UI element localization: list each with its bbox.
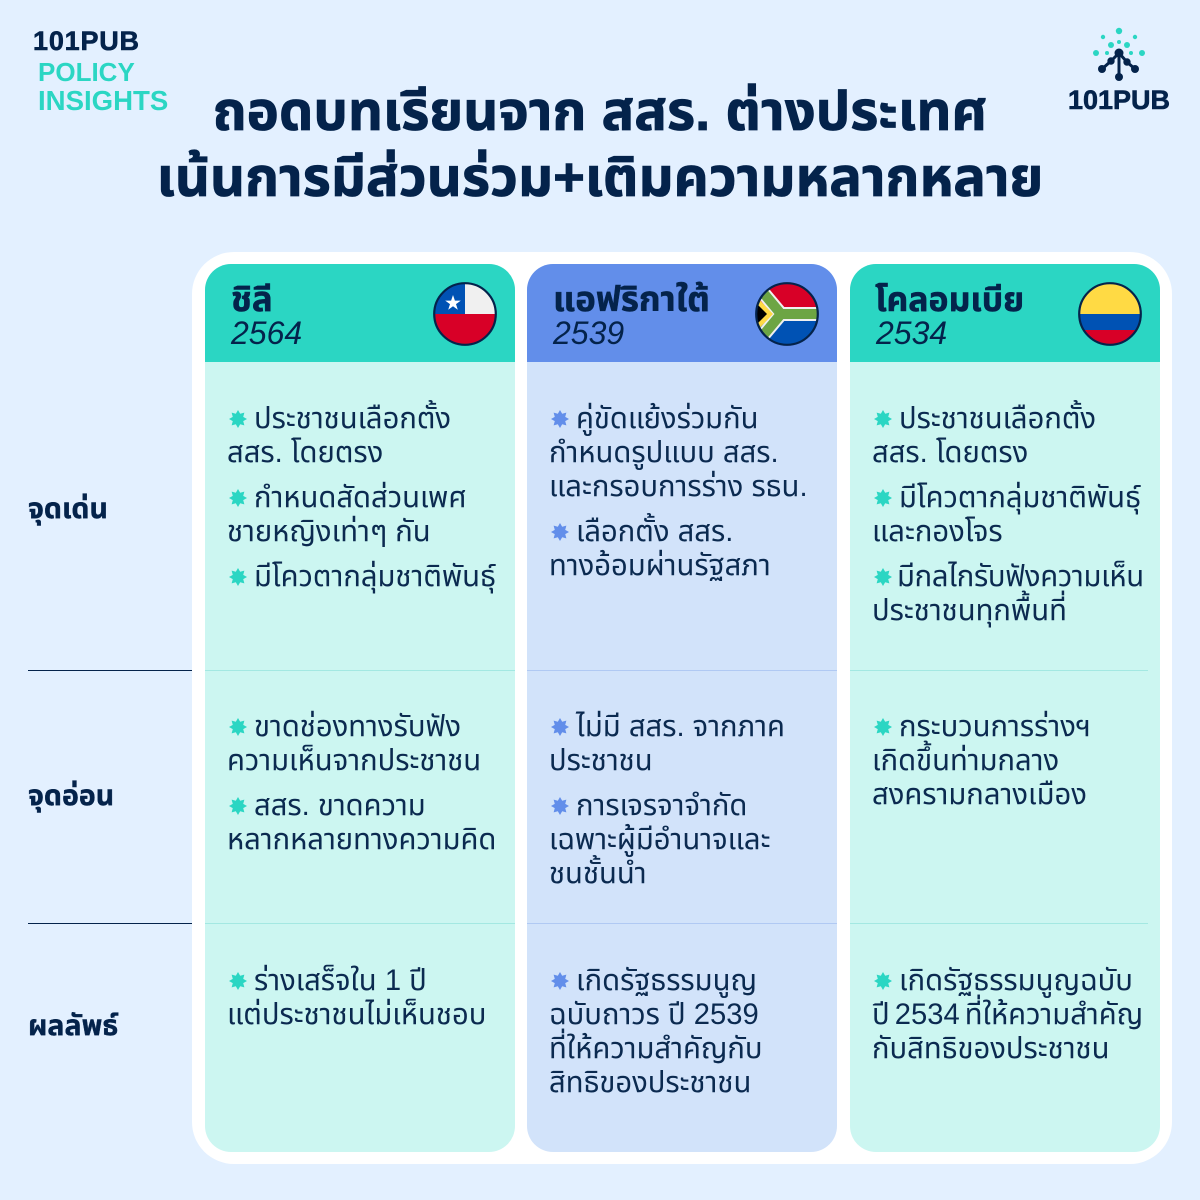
- Chile highlights text: กำหนดสัดส่วนเพศ: [254, 482, 467, 514]
- Chile highlights text: สสร. โดยตรง: [227, 437, 383, 469]
- Chile name: ชิลี: [231, 280, 273, 319]
- South Africa highlights text: [549, 402, 808, 582]
- South Africa results text: เกิดรัฐธรรมนูญ: [576, 965, 757, 997]
- Colombia name: โคลอมเบีย: [875, 281, 1024, 319]
- South Africa highlights text: และกรอบการร่าง รธน.: [549, 471, 808, 503]
- Chile highlights text: มีโควตากลุ่มชาติพันธุ์: [254, 561, 496, 593]
- South Africa weaknesses text: การเจรจาจำกัด: [576, 790, 747, 822]
- Chile highlights text: ประชาชนเลือกตั้ง: [254, 403, 451, 435]
- Colombia highlights text: มีกลไกรับฟังความเห็น: [897, 561, 1144, 593]
- Colombia highlights text: [872, 400, 1144, 628]
- Colombia year: 2534: [876, 315, 947, 351]
- Colombia highlights text: มีโควตากลุ่มชาติพันธุ์: [899, 482, 1141, 514]
- South Africa weaknesses text: ประชาชน: [549, 745, 653, 777]
- Chile highlights text: ชายหญิงเท่าๆ กัน: [227, 516, 431, 548]
- South Africa weaknesses text: ชนชั้นนำ: [549, 858, 647, 890]
- flag: South Africa: [755, 282, 819, 346]
- Chile weaknesses text: สสร. ขาดความ: [254, 790, 426, 822]
- Colombia results text: เกิดรัฐธรรมนูญฉบับ: [899, 965, 1133, 997]
- Colombia highlights text: ประชาชนทุกพื้นที่: [872, 595, 1067, 627]
- column: Chile: [205, 264, 515, 1152]
- logo: 101PUB Policy Insights: POLICY: [38, 57, 135, 87]
- Colombia highlights text: และกองโจร: [872, 516, 1003, 548]
- South Africa results text: ที่ให้ความสำคัญกับ: [549, 1033, 763, 1065]
- title: [157, 81, 1043, 208]
- logo: 101PUB Policy Insights: [33, 26, 168, 116]
- title: เน้นการมีส่วนร่วม+เติมความหลากหลาย: [157, 147, 1043, 208]
- Chile year: 2564: [231, 315, 302, 351]
- South Africa header: [527, 264, 837, 362]
- South Africa highlights text: เลือกตั้ง สสร.: [576, 516, 733, 548]
- logo: 101PUB network mark: 101PUB: [1068, 85, 1170, 115]
- Colombia weaknesses text: กระบวนการร่างฯ: [899, 711, 1091, 743]
- flag: Colombia: [1078, 282, 1142, 346]
- Colombia highlights text: ประชาชนเลือกตั้ง: [899, 403, 1096, 435]
- logo: 101PUB Policy Insights: INSIGHTS: [38, 85, 168, 116]
- Colombia results text: ปี 2534 ที่ให้ความสำคัญ: [872, 999, 1143, 1031]
- row label: highlights: จุดเด่น: [28, 493, 108, 525]
- column: South Africa: [527, 264, 837, 1152]
- South Africa results text: สิทธิของประชาชน: [549, 1067, 751, 1099]
- row label: results: ผลลัพธ์: [28, 1010, 118, 1042]
- divider: [205, 670, 515, 671]
- South Africa highlights text: คู่ขัดแย้งร่วมกัน: [576, 403, 759, 435]
- flag: Chile: [433, 282, 497, 346]
- logo: 101PUB Policy Insights: 101PUB: [33, 26, 140, 56]
- logo: 101PUB network mark: [1068, 28, 1170, 115]
- Colombia header: [850, 264, 1160, 362]
- Chile weaknesses text: ความเห็นจากประชาชน: [227, 745, 481, 777]
- South Africa highlights text: ทางอ้อมผ่านรัฐสภา: [549, 550, 771, 582]
- Chile results text: [227, 964, 486, 1031]
- South Africa results text: [549, 965, 763, 1099]
- title: ถอดบทเรียนจาก สสร. ต่างประเทศ: [213, 81, 987, 142]
- Colombia weaknesses text: สงครามกลางเมือง: [872, 779, 1087, 811]
- Chile results text: ร่างเสร็จใน 1 ปี: [254, 965, 427, 997]
- row divider: weaknesses and results: [28, 923, 193, 924]
- Colombia highlights text: สสร. โดยตรง: [872, 437, 1028, 469]
- South Africa weaknesses text: เฉพาะผู้มีอำนาจและ: [549, 824, 770, 856]
- Colombia weaknesses text: เกิดขึ้นท่ามกลาง: [872, 745, 1059, 777]
- Chile results text: แต่ประชาชนไม่เห็นชอบ: [227, 999, 486, 1031]
- Chile weaknesses text: [227, 710, 496, 856]
- South Africa weaknesses text: ไม่มี สสร. จากภาค: [576, 711, 785, 743]
- South Africa name: แอฟริกาใต้: [553, 280, 710, 319]
- Chile weaknesses text: ขาดช่องทางรับฟัง: [254, 711, 461, 743]
- row divider: highlights and weaknesses: [28, 670, 193, 671]
- Chile weaknesses text: หลากหลายทางความคิด: [227, 824, 496, 856]
- Colombia results text: กับสิทธิของประชาชน: [872, 1033, 1110, 1065]
- column: Colombia: [850, 264, 1160, 1152]
- Colombia results text: [872, 965, 1143, 1065]
- South Africa results text: ฉบับถาวร ปี 2539: [549, 999, 759, 1031]
- South Africa highlights text: กำหนดรูปแบบ สสร.: [549, 437, 779, 469]
- Chile highlights text: [227, 400, 496, 594]
- South Africa weaknesses text: [549, 710, 785, 890]
- Chile header: [205, 264, 515, 362]
- Colombia weaknesses text: [872, 710, 1091, 811]
- comparison table panel: [192, 252, 1172, 1164]
- South Africa year: 2539: [553, 315, 624, 351]
- row label: weaknesses: จุดอ่อน: [28, 780, 114, 812]
